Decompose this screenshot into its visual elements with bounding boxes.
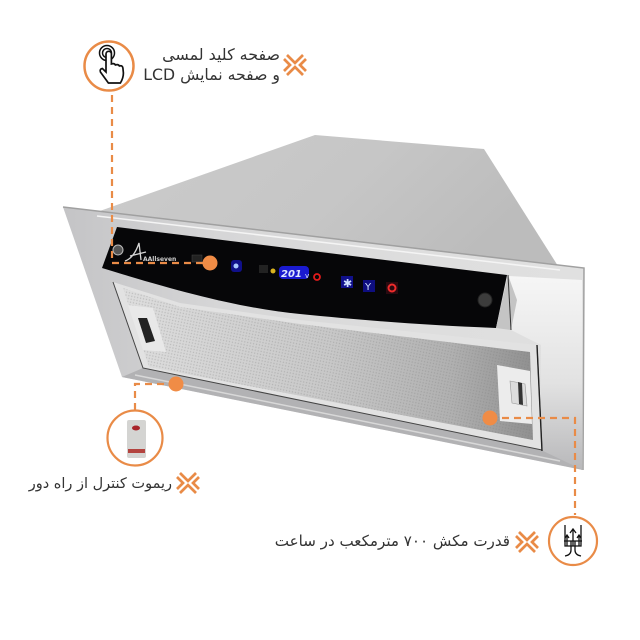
icon: touch hand bbox=[84, 42, 134, 90]
snow button: ✱ bbox=[343, 277, 352, 290]
icon: suction power bbox=[549, 517, 597, 565]
heading: remote control: ریموت کنترل از راه دور bbox=[28, 476, 172, 492]
heading: touch panel: صفحه کلید لمسی bbox=[162, 45, 280, 64]
knob left bbox=[113, 245, 123, 255]
hood product illustration bbox=[63, 135, 584, 470]
right filter handle bbox=[497, 365, 532, 424]
brand logo: AAllseven bbox=[143, 256, 176, 263]
left filter handle bbox=[128, 305, 166, 352]
icon: cross ornament bbox=[516, 532, 538, 552]
knob right bbox=[478, 293, 492, 307]
filter mesh bbox=[113, 282, 542, 451]
timer display bbox=[259, 265, 320, 280]
power button bbox=[386, 282, 398, 294]
timer display: 201 bbox=[281, 269, 302, 280]
control panel bbox=[102, 227, 517, 330]
icon: cross ornament bbox=[284, 55, 306, 75]
callout: touch panel leader line bbox=[112, 95, 218, 270]
callout: remote leader line bbox=[135, 376, 184, 410]
icon: remote control bbox=[108, 410, 162, 466]
right frame highlight bbox=[509, 276, 582, 470]
icon: cross ornament bbox=[177, 473, 199, 493]
stainless frame bbox=[63, 207, 584, 470]
heading: suction power: قدرت مکش ۷۰۰ مترمکعب در ساعت bbox=[275, 532, 510, 550]
heading: touch panel: و صفحه نمایش LCD bbox=[143, 65, 280, 85]
fan button bbox=[363, 280, 375, 293]
brand logo bbox=[125, 243, 176, 263]
heading: touch panel bbox=[143, 45, 280, 85]
fan button: Y bbox=[364, 282, 372, 293]
lower frame band bbox=[122, 368, 583, 470]
timer display: v bbox=[305, 272, 309, 280]
callout: suction leader line bbox=[482, 410, 575, 515]
blue button bbox=[231, 260, 242, 272]
light button bbox=[192, 255, 202, 262]
hood rear body bbox=[97, 135, 558, 266]
